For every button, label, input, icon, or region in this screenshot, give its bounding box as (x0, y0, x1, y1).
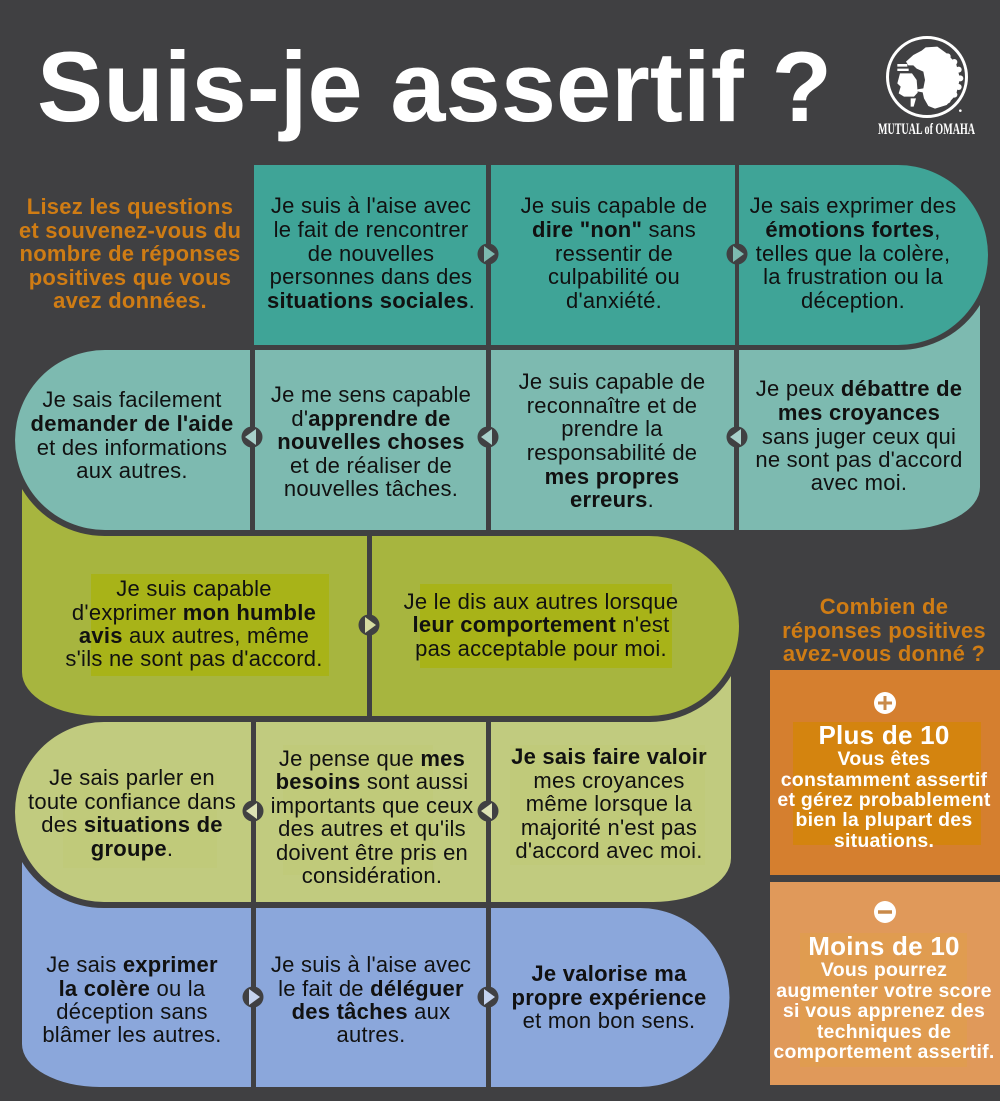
logo: Mutual of Omaha (878, 38, 975, 138)
question 9: leur comportement n'est (413, 612, 669, 637)
intro text: positives que vous (29, 265, 231, 290)
panel: moins de 10: Vous pourrez (821, 959, 947, 981)
results heading: réponses positives (782, 618, 986, 643)
question 11: des autres et qu'ils (278, 816, 466, 841)
question 10: même lorsque la (526, 791, 693, 816)
intro text: Lisez les questions (27, 194, 233, 219)
question 4: mes croyances (778, 400, 940, 425)
question 7: et des informations (37, 435, 227, 460)
question 2: dire "non" sans (532, 217, 696, 242)
question 2 (521, 193, 707, 313)
question 10 (511, 744, 707, 863)
question 14: autres. (336, 1022, 406, 1047)
row 4: light green cells (15, 676, 731, 902)
intro text: avez données. (53, 288, 207, 313)
question 3: déception. (801, 288, 905, 313)
question 11: doivent être pris en (276, 840, 468, 865)
row 1: teal cells (254, 165, 988, 345)
question 1: Je suis à l'aise avec (271, 193, 471, 218)
arrow: row 3 (358, 614, 380, 636)
question 1: personnes dans des (270, 264, 472, 289)
question 15: Je valorise ma (531, 961, 687, 986)
question 7 (31, 387, 233, 483)
question 6 (271, 382, 471, 501)
title: Suis-je assertif ? (37, 31, 832, 142)
question 3: telles que la colère, (756, 241, 950, 266)
question 6: et de réaliser de (290, 453, 452, 478)
results heading: avez-vous donné ? (783, 641, 985, 666)
results heading: Combien de (820, 594, 948, 619)
question 7: aux autres. (76, 458, 188, 483)
panel: plus de 10: Plus de 10 (818, 720, 950, 750)
question 5: Je suis capable de (519, 369, 705, 394)
question 9: pas acceptable pour moi. (415, 636, 667, 661)
arrow: row 4 first (478, 800, 498, 822)
question 5: mes propres (545, 464, 679, 489)
results heading (782, 594, 986, 666)
question 3: émotions fortes, (765, 217, 941, 242)
panel: moins de 10: augmenter votre score (776, 980, 992, 1002)
question 11: importants que ceux (271, 793, 473, 818)
question 6: nouvelles tâches. (284, 476, 458, 501)
intro text (19, 194, 241, 313)
question 12: des situations de (41, 812, 223, 837)
question 9: Je le dis aux autres lorsque (404, 589, 678, 614)
arrow: row 1 second (726, 244, 748, 264)
question 6: d'apprendre de (291, 406, 451, 431)
question 8: s'ils ne sont pas d'accord. (65, 646, 323, 671)
question 11: considération. (302, 863, 442, 888)
question 9 (404, 589, 678, 661)
panel: moins de 10: techniques de (817, 1021, 951, 1043)
question 5: reconnaître et de (527, 393, 697, 418)
question 15: propre expérience (512, 985, 706, 1010)
arrow: row 2 first (726, 426, 748, 448)
question 1: le fait de rencontrer (274, 217, 468, 242)
question 2: ressentir de (555, 241, 673, 266)
question 13: déception sans (56, 999, 208, 1024)
question 5: erreurs. (570, 487, 654, 512)
question 11 (271, 746, 473, 888)
panel: plus de 10: bien la plupart des (795, 809, 973, 831)
question 5: prendre la (561, 416, 663, 441)
question 3: la frustration ou la (763, 264, 943, 289)
question 7: Je sais facilement (42, 387, 222, 412)
question 1 (267, 193, 475, 313)
question 4: sans juger ceux qui (762, 424, 956, 449)
question 5: responsabilité de (527, 440, 697, 465)
question 13: blâmer les autres. (42, 1022, 222, 1047)
question 3 (750, 193, 956, 313)
question 12: Je sais parler en (49, 765, 215, 790)
question 12: groupe. (91, 836, 173, 861)
panel: moins de 10: comportement assertif. (773, 1041, 995, 1063)
question 8: avis aux autres, même (79, 623, 309, 648)
panel: moins de 10: si vous apprenez des (783, 1000, 985, 1022)
question 11: besoins sont aussi (276, 769, 468, 794)
row 3: olive cells (22, 489, 739, 716)
panel: moins de 10: Moins de 10 (808, 931, 960, 961)
question 1: de nouvelles (308, 241, 434, 266)
question 15: et mon bon sens. (523, 1008, 695, 1033)
row 2: light teal cells (15, 305, 980, 530)
question 2: culpabilité ou (548, 264, 680, 289)
question 15 (512, 961, 706, 1033)
question 6: nouvelles choses (277, 429, 465, 454)
arrow: row 2 third (242, 426, 262, 448)
question 10: majorité n'est pas (521, 815, 697, 840)
question 14: le fait de déléguer (278, 976, 464, 1001)
question 6: Je me sens capable (271, 382, 471, 407)
intro text: nombre de réponses (20, 241, 240, 266)
question 2: Je suis capable de (521, 193, 707, 218)
arrow: row 2 second (478, 426, 498, 448)
question 3: Je sais exprimer des (750, 193, 956, 218)
question 13 (42, 952, 222, 1047)
question 2: d'anxiété. (566, 288, 662, 313)
row 5: blue cells (22, 862, 730, 1087)
icon: minus (874, 901, 896, 923)
question 10: d'accord avec moi. (515, 838, 703, 863)
question 14: des tâches aux (292, 999, 450, 1024)
arrow: row 5 second (478, 986, 498, 1008)
panel: moins de 10 (770, 882, 1000, 1085)
question 4 (755, 376, 963, 495)
question 4: ne sont pas d'accord (755, 447, 963, 472)
arrow: row 1 first (478, 244, 498, 264)
question 5 (519, 369, 705, 512)
question 12 (28, 765, 236, 861)
question 10: Je sais faire valoir (511, 744, 707, 769)
question 4: avec moi. (811, 470, 907, 495)
question 1: situations sociales. (267, 288, 475, 313)
question 7: demander de l'aide (31, 411, 233, 436)
question 12: toute confiance dans (28, 789, 236, 814)
icon: plus (874, 692, 896, 714)
question 13: la colère ou la (59, 976, 206, 1001)
question 4: Je peux débattre de (756, 376, 962, 401)
panel: plus de 10: situations. (834, 830, 934, 852)
question 8: Je suis capable (116, 576, 272, 601)
question 10: mes croyances (533, 768, 685, 793)
question 8: d'exprimer mon humble (72, 600, 316, 625)
question 11: Je pense que mes (279, 746, 465, 771)
question 13: Je sais exprimer (46, 952, 218, 977)
question 14 (271, 952, 471, 1047)
panel: plus de 10: constamment assertif (781, 769, 988, 791)
panel: plus de 10 (770, 670, 1000, 875)
intro text: et souvenez-vous du (19, 218, 241, 243)
arrow: row 4 second (242, 800, 264, 822)
question 14: Je suis à l'aise avec (271, 952, 471, 977)
question 8 (65, 576, 323, 671)
panel: plus de 10: Vous êtes (838, 748, 930, 770)
arrow: row 5 first (242, 986, 264, 1008)
panel: plus de 10: et gérez probablement (777, 789, 991, 811)
